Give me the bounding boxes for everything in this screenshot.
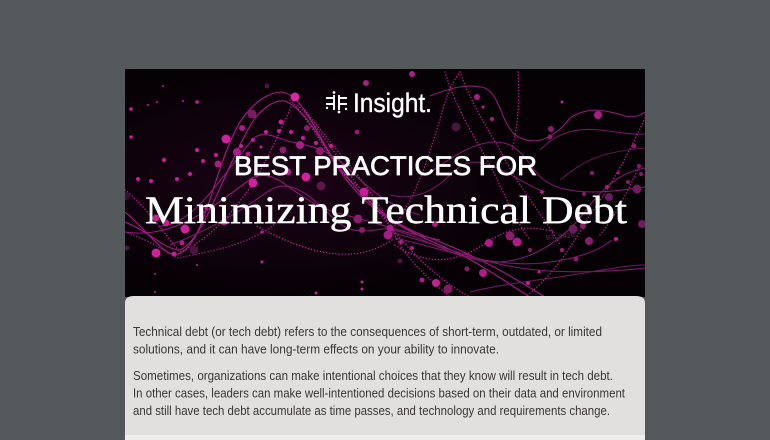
logo icon	[326, 91, 347, 113]
small data number: 93.9426	[545, 232, 576, 243]
intro paragraph 1: solutions, and it can have long-term effects on your ability to innovate.	[133, 342, 499, 356]
heading: best practices for: BEST PRACTICES FOR	[234, 151, 537, 181]
wave lines	[125, 86, 645, 297]
intro text panel	[125, 296, 645, 435]
Insight logo	[326, 88, 432, 118]
intro paragraph 2: In other cases, leaders can make well-intentioned decisions based on their data and environment	[133, 386, 625, 400]
intro paragraph 2: Sometimes, organizations can make intentional choices that they know will result in tech debt.	[133, 368, 613, 383]
data particles	[122, 71, 646, 294]
intro paragraph 2: and still have tech debt accumulate as time passes, and technology and requirements change.	[133, 403, 610, 418]
intro paragraph 1: Technical debt (or tech debt) refers to the consequences of short-term, outdated, or limited	[133, 324, 602, 339]
hero banner	[122, 69, 646, 297]
dotted wave lines	[125, 72, 645, 297]
heading: minimizing technical debt: Minimizing Technical Debt	[145, 189, 627, 232]
lower panel edge	[125, 435, 645, 440]
logo wordmark: Insight.	[353, 88, 432, 118]
